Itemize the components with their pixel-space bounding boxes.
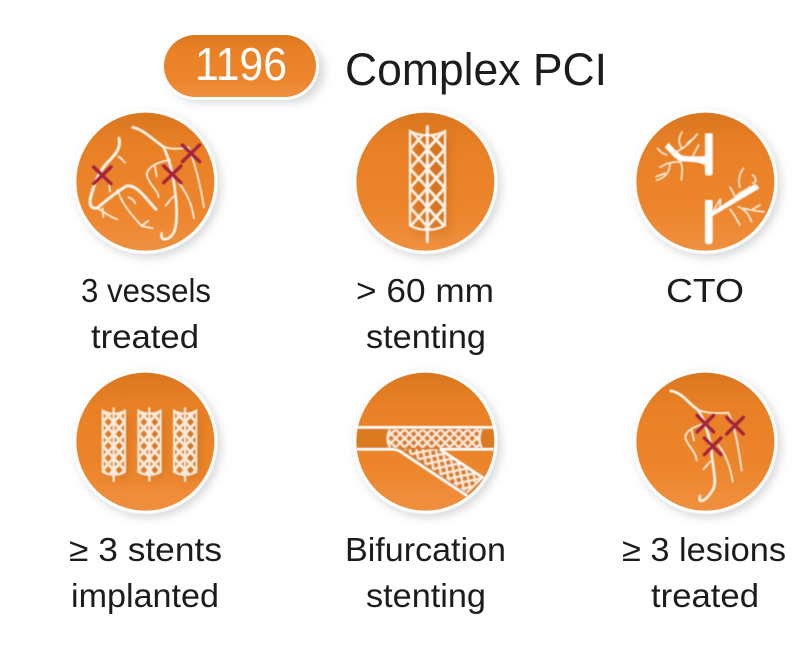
badge: 1196: 1196 bbox=[195, 38, 287, 90]
icon: long stent bbox=[353, 109, 501, 257]
label: 3 or more stents implanted: ≥ 3 stents bbox=[69, 531, 222, 568]
icon: 3 vessels treated bbox=[73, 109, 221, 257]
icon: three stents bbox=[73, 369, 221, 517]
label: 3 or more stents implanted: implanted bbox=[71, 577, 219, 614]
label: bifurcation stenting bbox=[345, 531, 506, 614]
label: > 60 mm stenting bbox=[356, 272, 494, 355]
icon: 3 lesions treated bbox=[633, 369, 781, 517]
label: CTO: CTO bbox=[666, 272, 744, 309]
label: bifurcation stenting: stenting bbox=[366, 577, 486, 614]
label: 3 vessels treated: treated bbox=[91, 318, 199, 355]
label: > 60 mm stenting: > 60 mm bbox=[356, 272, 494, 309]
badge: 1196 bbox=[161, 32, 324, 102]
label: bifurcation stenting: Bifurcation bbox=[345, 531, 506, 568]
label: 3 vessels treated bbox=[81, 272, 211, 355]
label: > 60 mm stenting: stenting bbox=[366, 318, 486, 355]
icon: CTO bbox=[633, 109, 781, 257]
label: 3 or more lesions treated: ≥ 3 lesions bbox=[622, 531, 786, 568]
label: 3 or more stents implanted bbox=[69, 531, 222, 614]
title: Complex PCI bbox=[345, 44, 607, 95]
label: 3 or more lesions treated: treated bbox=[651, 577, 759, 614]
label: 3 or more lesions treated bbox=[622, 531, 786, 614]
icon: bifurcation stent bbox=[353, 369, 501, 517]
label: 3 vessels treated: 3 vessels bbox=[81, 272, 211, 309]
